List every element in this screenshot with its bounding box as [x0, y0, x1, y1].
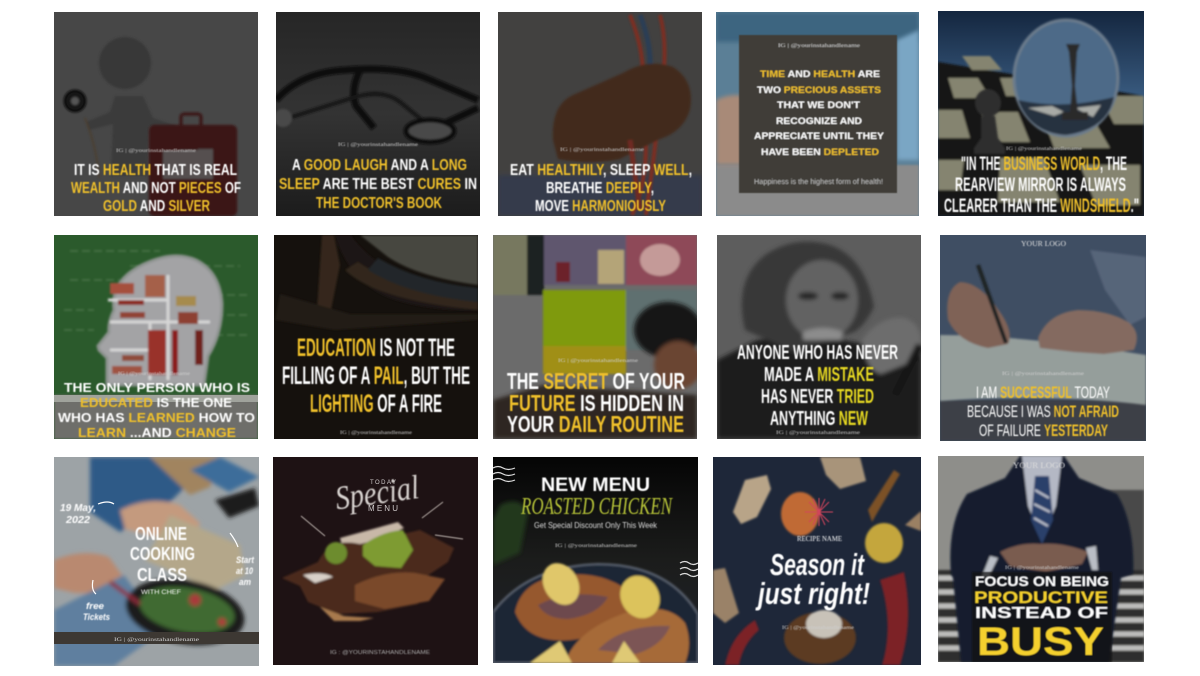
handle: IG : @YOURINSTAHANDLENAME	[330, 650, 431, 656]
headline block	[972, 572, 1112, 664]
handle: IG | @yourinstahandlename	[776, 431, 861, 436]
heading: daily routine quote: THE SECRET OF YOUR	[507, 368, 685, 394]
heading: online cooking class: COOKING	[130, 544, 195, 564]
steak dish	[282, 522, 454, 621]
subtext: with chef: WITH CHEF	[141, 590, 181, 596]
quote text: TIME AND HEALTH ARE	[760, 69, 880, 79]
date note: 2022	[65, 515, 90, 526]
panel: today's special menu	[273, 457, 478, 665]
script heading: just right!	[755, 576, 870, 611]
heading: mistake quote: ANYTHING NEW	[770, 408, 868, 430]
panel: business world quote, chess	[938, 11, 1144, 217]
icon: hand holding red stethoscope	[553, 15, 691, 215]
heading: mistake quote: MADE A MISTAKE	[764, 364, 874, 386]
heading: business quote: CLEARER THAN THE WINDSHIELD."	[944, 196, 1139, 217]
heading: laugh and sleep quote	[279, 157, 477, 212]
quote text: HAVE BEEN DEPLETED	[761, 147, 880, 157]
heading: business quote	[944, 154, 1139, 217]
script title: Special	[333, 469, 421, 517]
heading: eat healthily quote	[510, 162, 692, 215]
heading: mistake quote	[737, 342, 898, 430]
greenery	[493, 501, 528, 565]
firework spark	[805, 498, 833, 526]
label: menu: MENU	[368, 504, 398, 513]
plate with chicken	[493, 556, 698, 663]
heading: educated quote: LEARN ...AND CHANGE	[78, 426, 236, 440]
stairs	[938, 490, 1144, 662]
panel: success quote, writing hands	[940, 235, 1146, 441]
icon: 3D figure with stethoscope	[65, 37, 177, 178]
heading: educated quote	[58, 381, 255, 440]
tickets note: free	[86, 601, 104, 611]
handle: IG | @yourinstahandlename	[778, 44, 861, 49]
icon: child with dark hair	[493, 302, 702, 439]
heading: laugh and sleep quote: THE DOCTOR'S BOOK	[316, 195, 443, 212]
heading: laugh and sleep quote: A GOOD LAUGH AND A LONG	[292, 157, 467, 174]
portrait	[717, 242, 921, 439]
panel: time and health quote, dark text box	[716, 12, 919, 216]
chalk formulas	[64, 251, 250, 335]
businessman in suit	[950, 456, 1133, 662]
heading: daily routine quote	[506, 372, 686, 433]
quote text: APPRECIATE UNTIL THEY	[754, 131, 884, 141]
label: today: TODAY	[370, 480, 396, 486]
label: recipe name: RECIPE NAME	[797, 535, 842, 543]
panel: new menu roasted chicken	[493, 457, 698, 663]
quote text: TWO PRECIOUS ASSETS	[757, 85, 881, 95]
handle: IG | @yourinstahandlename	[558, 359, 639, 364]
icon: stethoscope	[274, 69, 478, 142]
time note: am	[239, 577, 251, 587]
script heading: Season it	[770, 547, 865, 582]
heading: educated quote: EDUCATED IS THE ONE	[80, 396, 232, 410]
heading: success quote: OF FAILURE YESTERDAY	[979, 421, 1108, 440]
handle: IG | @yourinstahandlename	[560, 148, 645, 153]
handle: IG | @yourinstahandlename	[340, 431, 413, 436]
heading: education quote	[282, 334, 470, 418]
heading: health quote	[71, 162, 241, 215]
heading: online cooking class: ONLINE	[135, 524, 187, 544]
heading: mistake quote: HAS NEVER TRIED	[761, 386, 874, 408]
handle: IG | @yourinstahandlename	[1002, 372, 1085, 377]
heading: health quote: GOLD AND SILVER	[103, 198, 210, 215]
panel: education quote, head bookshelf	[54, 235, 258, 440]
subheading: roasted chicken: ROASTED CHICKEN	[520, 494, 673, 520]
arrows	[92, 502, 238, 594]
heading: education quote: EDUCATION IS NOT THE	[297, 334, 455, 362]
heading: education quote: FILLING OF A PAIL, BUT THE	[282, 362, 470, 390]
discount line: Get Special Discount Only This Week	[534, 521, 658, 530]
heading: success quote	[967, 383, 1119, 440]
date note: 19 May,	[60, 503, 96, 514]
tickets note	[83, 601, 110, 622]
headline block: FOCUS ON BEING	[975, 574, 1109, 589]
headline block: INSTEAD OF	[975, 605, 1108, 622]
date note	[60, 503, 96, 526]
handle: IG | @yourinstahandlename	[338, 143, 419, 148]
heading: business quote: "IN THE BUSINESS WORLD, THE	[961, 154, 1127, 175]
handle: IG | @yourinstahandlename	[118, 372, 191, 377]
handle: IG | @yourinstahandlename	[555, 544, 638, 549]
heading: daily routine quote: YOUR DAILY ROUTINE	[507, 411, 684, 437]
heading: success quote: I AM SUCCESSFUL TODAY	[976, 383, 1110, 402]
time note	[236, 555, 255, 587]
chessboard	[938, 56, 1144, 216]
heading: educated quote: WHO HAS LEARNED HOW TO	[58, 411, 255, 425]
text box	[739, 35, 897, 193]
heading: daily routine quote: FUTURE IS HIDDEN IN	[509, 390, 684, 416]
heading: educated quote: THE ONLY PERSON WHO IS	[64, 381, 250, 395]
handle bar	[54, 632, 259, 644]
heading: mistake quote: ANYONE WHO HAS NEVER	[737, 342, 898, 364]
heading: online cooking class: CLASS	[137, 565, 187, 585]
handle bar: IG | @yourinstahandlename	[114, 638, 200, 643]
heading: new menu: NEW MENU	[541, 475, 650, 496]
heading: laugh and sleep quote: SLEEP ARE THE BEST CURES IN	[279, 176, 477, 193]
heading: eat healthily quote: MOVE HARMONIOUSLY	[535, 198, 666, 215]
time note: at 10	[236, 566, 253, 576]
heading: health quote: IT IS HEALTH THAT IS REAL	[74, 162, 237, 179]
logo: YOUR LOGO	[1021, 240, 1066, 248]
time note: Start	[236, 555, 255, 565]
panel: online cooking class	[54, 457, 259, 666]
colourful shelves	[493, 235, 697, 374]
handle: IG | @yourinstahandlename	[116, 149, 197, 154]
quote text	[754, 69, 884, 157]
heading: education quote: LIGHTING OF A FIRE	[310, 390, 442, 418]
cooking photo	[54, 457, 259, 666]
logo: YOUR LOGO	[1013, 461, 1065, 470]
heading: success quote: BECAUSE I WAS NOT AFRAID	[967, 402, 1119, 421]
script heading	[755, 547, 870, 611]
icon: head-shaped bookshelf	[98, 256, 222, 385]
panel: daily routine quote, child studying	[493, 235, 702, 439]
panel: mistake quote, Einstein portrait	[717, 235, 921, 439]
tagline: Happiness is the highest form of health!	[754, 179, 883, 186]
icon: chess pawn	[974, 89, 1005, 154]
handle: IG | @yourinstahandlename	[1005, 566, 1080, 571]
icon: mirror with chess king	[1014, 20, 1118, 136]
quote text: RECOGNIZE AND	[776, 116, 863, 126]
library arches	[275, 235, 478, 330]
quote text: THAT WE DON'T	[777, 100, 861, 110]
paper and hands	[940, 250, 1146, 405]
panel: focus on being productive	[938, 456, 1144, 664]
icon: red medical case	[149, 114, 237, 216]
panel: season it just right	[713, 457, 921, 665]
handle: IG | @yourinstahandlename	[1006, 147, 1083, 152]
panel: education pail quote, library	[274, 235, 478, 439]
handle: IG | @yourinstahandlename	[782, 626, 855, 631]
tickets note: Tickets	[83, 612, 110, 622]
heading: eat healthily quote: EAT HEALTHILY, SLEEP WELL,	[510, 162, 692, 179]
panel: doctor's book quote, stethoscope	[274, 12, 480, 216]
heading: health quote: WEALTH AND NOT PIECES OF	[71, 180, 241, 197]
headline block: BUSY	[977, 620, 1104, 664]
heading: online cooking class	[130, 524, 195, 585]
spark lines	[301, 502, 463, 539]
panel: eat healthily quote, doctor's hand	[498, 12, 702, 216]
wave decorations	[493, 466, 698, 576]
headline block: PRODUCTIVE	[974, 589, 1108, 607]
food scatter	[713, 457, 921, 665]
heading: eat healthily quote: BREATHE DEEPLY,	[546, 180, 654, 197]
panel: health quote, figure with stethoscope	[54, 12, 258, 216]
